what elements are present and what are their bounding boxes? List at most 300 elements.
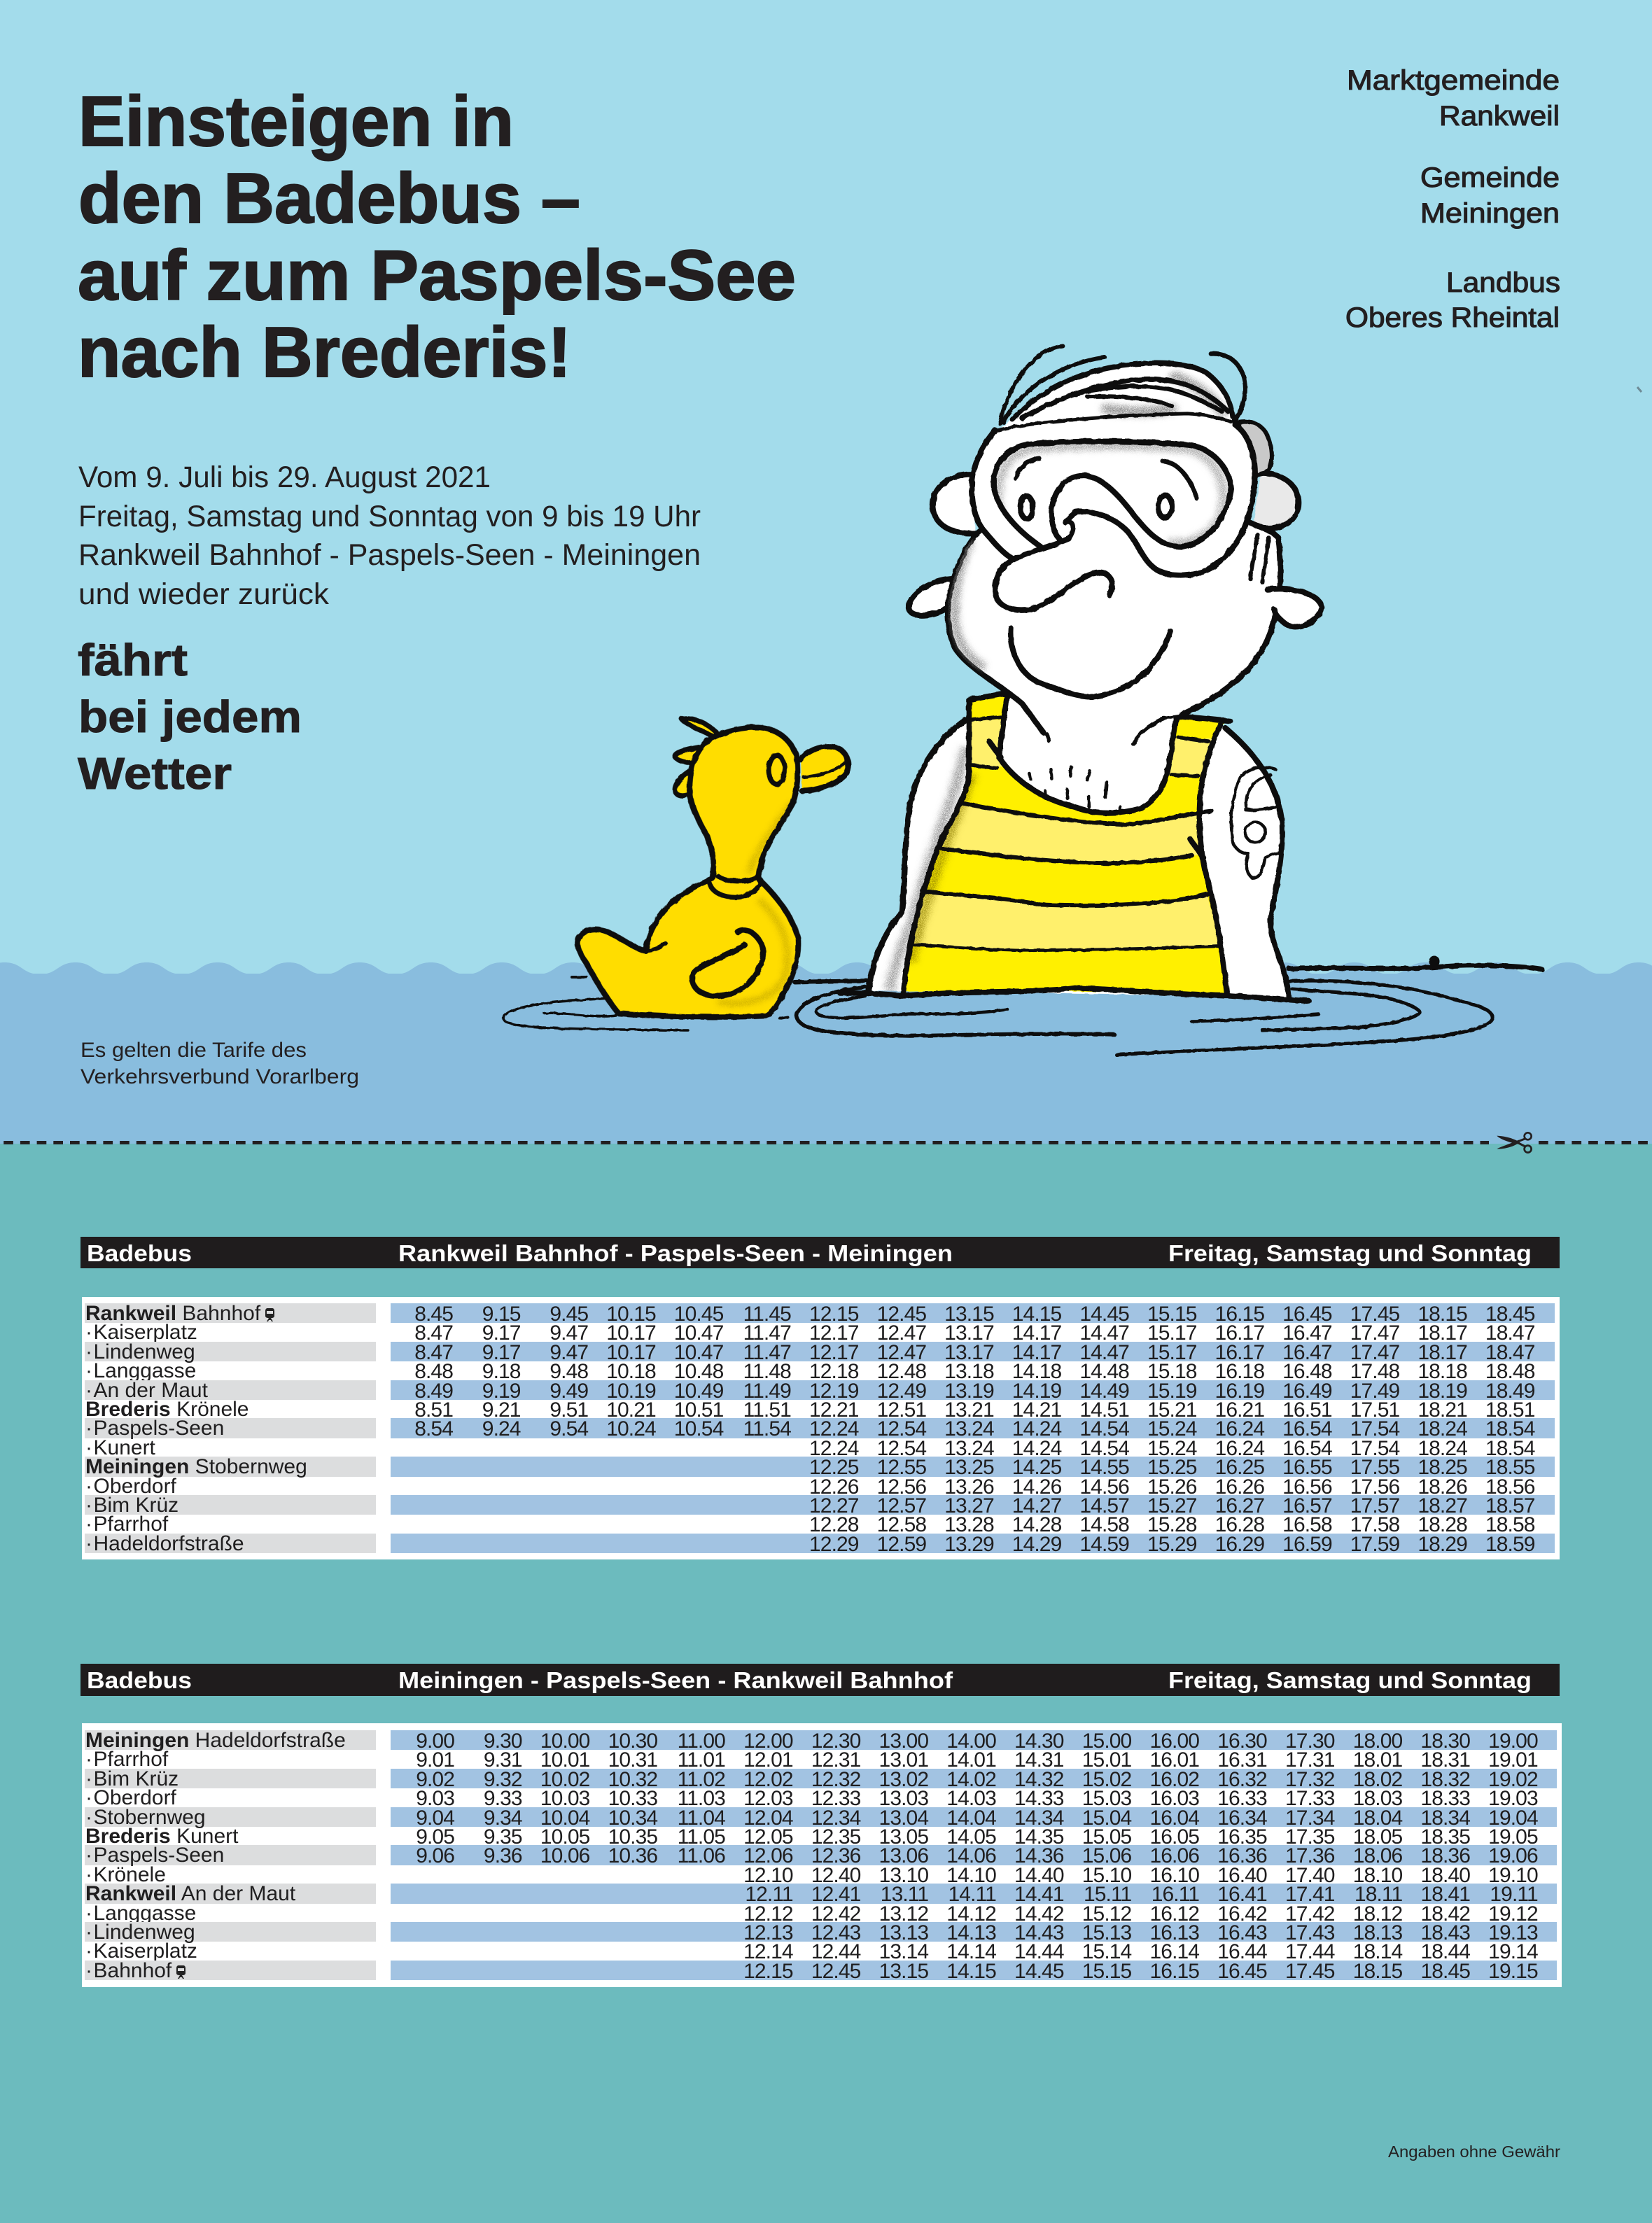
row: Rankweil Bahnhof: 9.45 [550,1303,588,1326]
row: Langgasse: 16.42 [1217,1902,1267,1926]
row: Lindenweg: 16.47 [1282,1341,1332,1364]
row: Oberdorf: 14.26 [1012,1475,1061,1499]
row: Stobernweg: 17.34 [1285,1807,1335,1830]
row: An der Maut: 14.19 [1012,1380,1061,1403]
row: Oberdorf: 18.03 [1353,1787,1402,1810]
row: Brederis Kunert: 12.35 [811,1825,860,1849]
row: Stobernweg: 10.34 [608,1807,657,1830]
row: Hadeldorfstraße: 14.59 [1079,1533,1129,1556]
row: Pfarrhof: 18.28 [1418,1513,1467,1536]
row: Rankweil Bahnhof: 12.45 [877,1303,926,1326]
duck beak [801,747,848,791]
row: Bim Krüz: 16.32 [1217,1768,1267,1791]
row: Paspels-Seen: 18.24 [1418,1417,1467,1440]
row: Kaiserplatz: 9.17 [482,1321,521,1345]
row: Pfarrhof: 14.28 [1012,1513,1061,1536]
chest hair [1029,766,1120,810]
row: Langgasse: 14.18 [1012,1360,1061,1383]
row: Kaiserplatz: 12.17 [809,1321,859,1345]
row: Kunert: 18.24 [1418,1437,1467,1460]
row: Pfarrhof: · [85,1513,92,1536]
row: Paspels-Seen: 9.06 [416,1844,454,1867]
row: Oberdorf: 12.56 [877,1475,926,1499]
row: Paspels-Seen: 8.54 [414,1417,453,1440]
row: Oberdorf: 12.03 [743,1787,793,1810]
row: Meiningen Hadeldorfstraße: 19.00 [1488,1730,1538,1753]
row: Stobernweg: 16.34 [1217,1807,1267,1830]
row: Langgasse: 12.42 [811,1902,860,1926]
row: Krönele: Krönele [94,1863,166,1886]
row: Pfarrhof [82,1514,1560,1534]
row: Meiningen Stobernweg: 18.25 [1418,1456,1467,1479]
row: An der Maut: 8.49 [414,1380,453,1403]
row: Langgasse: 12.48 [877,1360,926,1383]
row: Brederis Kunert: 9.05 [416,1825,454,1849]
row: Bim Krüz: 17.32 [1285,1768,1335,1791]
row: Bim Krüz: Bim Krüz [94,1767,178,1790]
row: Krönele: 18.10 [1353,1864,1402,1887]
row: Bim Krüz: 12.02 [743,1768,793,1791]
row: Stobernweg: 14.04 [946,1807,996,1830]
issuers: Rankweil [1439,101,1560,132]
fährt bei jedem Wetter: bei jedem [78,692,302,742]
headline: Einsteigen in [78,83,514,161]
right arm outline [1225,728,1289,997]
row: Paspels-Seen: 11.54 [743,1417,791,1440]
row: Langgasse: 9.18 [482,1360,521,1383]
duck wing [692,930,763,996]
row: Kaiserplatz: 18.44 [1420,1940,1470,1963]
row: An der Maut: · [85,1379,92,1402]
row: Brederis Kunert: 17.35 [1285,1825,1335,1849]
row: Rankweil Bahnhof: 17.45 [1350,1303,1399,1326]
row: Bim Krüz: 16.57 [1282,1494,1332,1517]
row: Kaiserplatz: 15.17 [1147,1321,1197,1345]
row: Bahnhof: 15.15 [1082,1960,1131,1983]
row: Kaiserplatz: 16.17 [1215,1321,1264,1345]
row: Kaiserplatz: · [85,1321,92,1344]
row: Krönele: 16.10 [1149,1864,1199,1887]
row: Meiningen Stobernweg: 13.25 [944,1456,994,1479]
row: An der Maut: 9.49 [550,1380,588,1403]
row: Paspels-Seen: 17.54 [1350,1417,1399,1440]
row: Kunert: 13.24 [944,1437,994,1460]
row: Stobernweg: 12.34 [811,1807,860,1830]
row: Paspels-Seen: 19.06 [1488,1844,1538,1867]
row: Oberdorf: 16.03 [1149,1787,1199,1810]
row: Krönele: 14.40 [1014,1864,1064,1887]
row: Rankweil Bahnhof: Rankweil Bahnhof [85,1302,260,1325]
row: Lindenweg: 14.17 [1012,1341,1061,1364]
row: Paspels-Seen: 12.06 [743,1844,793,1867]
row: Kunert: Kunert [94,1436,155,1459]
row: Lindenweg: 15.13 [1082,1921,1131,1944]
row: Lindenweg [82,1922,1562,1941]
left arm outline [869,720,965,992]
row: Meiningen Hadeldorfstraße [82,1730,1562,1749]
row: Langgasse: · [85,1902,92,1925]
row: Stobernweg: · [85,1806,92,1829]
tail crease [644,944,666,951]
row: Krönele: 19.10 [1488,1864,1538,1887]
duck shading [720,806,790,1004]
row: Paspels-Seen: 12.36 [811,1844,860,1867]
row: Brederis Krönele: 8.51 [414,1398,453,1422]
service dates and route: Rankweil Bahnhof - Paspels-Seen - Meiningen [78,538,701,572]
row: Bim Krüz [82,1769,1562,1788]
man: body [840,693,1309,1001]
row: Bim Krüz: 16.02 [1149,1768,1199,1791]
service dates and route: und wieder zurück [78,577,329,611]
row: Paspels-Seen: 14.54 [1079,1417,1129,1440]
row: Bim Krüz: 18.32 [1420,1768,1470,1791]
row: Bim Krüz: 10.32 [608,1768,657,1791]
row: Kaiserplatz: 19.14 [1488,1940,1538,1963]
row: Brederis Kunert: 15.05 [1082,1825,1131,1849]
row: Meiningen Hadeldorfstraße: 13.00 [879,1730,928,1753]
row: Brederis Krönele: 15.21 [1147,1398,1197,1422]
face [948,418,1280,733]
row: Hadeldorfstraße: 13.29 [944,1533,994,1556]
row: An der Maut: 15.19 [1147,1380,1197,1403]
row: Oberdorf: 14.56 [1079,1475,1129,1499]
row: Langgasse: 18.12 [1353,1902,1402,1926]
row: Meiningen Hadeldorfstraße: 12.00 [743,1730,793,1753]
row: Rankweil An der Maut: 17.41 [1285,1883,1335,1906]
eyebrows [1016,458,1197,498]
left upper ear [932,475,975,533]
row: Kaiserplatz: 12.14 [743,1940,793,1963]
row: Hadeldorfstraße: 18.29 [1418,1533,1467,1556]
row: Brederis Krönele: 10.21 [606,1398,656,1422]
row: Lindenweg: · [85,1340,92,1363]
service dates and route: Vom 9. Juli bis 29. August 2021 [78,461,491,494]
row: Meiningen Hadeldorfstraße: 16.30 [1217,1730,1267,1753]
row: Lindenweg: 11.47 [743,1341,791,1364]
row: Bim Krüz: · [85,1494,92,1517]
row: Kaiserplatz: 18.17 [1418,1321,1467,1345]
row: Paspels-Seen: 11.06 [678,1844,725,1867]
row: Meiningen Stobernweg: 14.55 [1079,1456,1129,1479]
row: Paspels-Seen: 12.54 [877,1417,926,1440]
row: Rankweil An der Maut: 18.11 [1354,1883,1402,1906]
left lower ear [909,579,951,615]
row: Lindenweg: Lindenweg [94,1921,195,1944]
row: Stobernweg: 16.04 [1149,1807,1199,1830]
row: Pfarrhof: 17.31 [1285,1748,1335,1772]
row: Rankweil Bahnhof: 18.15 [1418,1303,1467,1326]
row: An der Maut: 9.19 [482,1380,521,1403]
row: Bahnhof: 12.15 [743,1960,793,1983]
row: Bahnhof: 14.45 [1014,1960,1064,1983]
row: Bim Krüz [82,1495,1560,1514]
row: Brederis Krönele: 13.21 [944,1398,994,1422]
row: Kaiserplatz: 12.44 [811,1940,860,1963]
row: Rankweil Bahnhof: 9.15 [482,1303,521,1326]
row: Kaiserplatz: 16.47 [1282,1321,1332,1345]
row: Meiningen Hadeldorfstraße: 18.30 [1420,1730,1470,1753]
row: Kaiserplatz: 14.47 [1079,1321,1129,1345]
row: Brederis Kunert: 19.05 [1488,1825,1538,1849]
row: Langgasse: 18.48 [1485,1360,1534,1383]
row: Rankweil Bahnhof: 12.15 [809,1303,859,1326]
arm shading [890,750,965,988]
row: Meiningen Stobernweg: 18.55 [1485,1456,1535,1479]
row: Bim Krüz: 18.02 [1353,1768,1402,1791]
row: Kaiserplatz: 15.14 [1082,1940,1131,1963]
duck eye [769,755,785,784]
row: Meiningen Hadeldorfstraße: 11.00 [678,1730,725,1753]
row: Bim Krüz: 18.57 [1485,1494,1535,1517]
row: Kunert: 15.24 [1147,1437,1197,1460]
row: Lindenweg: 17.47 [1350,1341,1399,1364]
row: Paspels-Seen: 14.36 [1014,1844,1064,1867]
row: Bim Krüz: 11.02 [678,1768,725,1791]
timetable 2 header bar: Meiningen - Paspels-Seen - Rankweil Bahnhof [398,1667,953,1693]
row: Hadeldorfstraße: 12.59 [877,1533,926,1556]
row: Bim Krüz: 14.02 [946,1768,996,1791]
row: Meiningen Hadeldorfstraße: 16.00 [1149,1730,1199,1753]
row: Pfarrhof: 15.28 [1147,1513,1197,1536]
row: Rankweil An der Maut: 16.11 [1152,1883,1199,1906]
row: Kaiserplatz: Kaiserplatz [94,1321,197,1344]
row: Paspels-Seen: 18.36 [1420,1844,1470,1867]
timetable 1: Rankweil to Meiningen [82,1297,1560,1559]
row: Lindenweg: 13.17 [944,1341,994,1364]
issuers: Oberes Rheintal [1345,302,1560,333]
row: Oberdorf: 19.03 [1488,1787,1538,1810]
row: Paspels-Seen [82,1845,1562,1865]
row: Brederis Kunert [82,1826,1562,1845]
row: Paspels-Seen: 10.36 [608,1844,657,1867]
row: Paspels-Seen: 17.36 [1285,1844,1335,1867]
tariff note [80,1039,359,1088]
right upper ear [1253,473,1298,528]
row: Meiningen Stobernweg: 16.55 [1282,1456,1332,1479]
row: Paspels-Seen: 18.54 [1485,1417,1534,1440]
row: Bim Krüz: 12.57 [877,1494,926,1517]
row: Bim Krüz: 10.02 [540,1768,589,1791]
row: Lindenweg: 12.47 [877,1341,926,1364]
row: Kaiserplatz: 18.14 [1353,1940,1402,1963]
row: Kaiserplatz: 9.47 [550,1321,588,1345]
row: Kunert: 16.24 [1215,1437,1264,1460]
issuers [1345,65,1560,333]
row: Lindenweg: 15.17 [1147,1341,1197,1364]
row: Krönele: 15.10 [1082,1864,1131,1887]
fährt bei jedem Wetter: Wetter [78,748,232,799]
row: Brederis Kunert: 18.35 [1420,1825,1470,1849]
row: Bahnhof: 16.15 [1149,1960,1199,1983]
row: Lindenweg [82,1342,1560,1361]
row: An der Maut: 16.49 [1282,1380,1332,1403]
hair [998,346,1245,433]
row: Paspels-Seen: Paspels-Seen [94,1417,224,1440]
row: Stobernweg: 18.04 [1353,1807,1402,1830]
row: Lindenweg: 14.47 [1079,1341,1129,1364]
row: Kaiserplatz: 14.14 [946,1940,996,1963]
row: Lindenweg: 10.17 [606,1341,656,1364]
issuers: Landbus [1446,267,1560,298]
row: Rankweil Bahnhof: 16.15 [1215,1303,1264,1326]
issuers: Meiningen [1420,198,1560,229]
row: Paspels-Seen: · [85,1417,92,1440]
row: Meiningen Hadeldorfstraße: 17.30 [1285,1730,1335,1753]
waterline at the waist [840,988,1309,1001]
row: Pfarrhof: 11.01 [678,1748,725,1772]
row: An der Maut [82,1380,1560,1399]
row: An der Maut: 11.49 [743,1380,791,1403]
row: Paspels-Seen: 16.36 [1217,1844,1267,1867]
row: Stobernweg: 11.04 [678,1807,725,1830]
row: Rankweil Bahnhof: 16.45 [1282,1303,1332,1326]
row: Krönele: 18.40 [1420,1864,1470,1887]
row: Hadeldorfstraße: 14.29 [1012,1533,1061,1556]
row: Oberdorf: 18.26 [1418,1475,1467,1499]
row: Brederis Krönele: 18.51 [1485,1398,1534,1422]
row: Kunert: 14.54 [1079,1437,1129,1460]
row: Brederis Krönele: Brederis Krönele [85,1398,248,1421]
row: Pfarrhof: 15.01 [1082,1748,1131,1772]
row: Kaiserplatz: 16.14 [1149,1940,1199,1963]
timetable 2 header bar [80,1664,1560,1696]
row: Oberdorf: 10.33 [608,1787,657,1810]
row: Rankweil An der Maut: 15.11 [1084,1883,1131,1906]
row: Lindenweg: 12.43 [811,1921,860,1944]
row: Paspels-Seen: 16.54 [1282,1417,1332,1440]
row: Paspels-Seen: 10.06 [540,1844,589,1867]
row: Kunert: 12.54 [877,1437,926,1460]
row: Paspels-Seen [82,1418,1560,1438]
row: Langgasse: 16.18 [1215,1360,1264,1383]
torso and arms fill [867,694,1289,997]
row: Meiningen Hadeldorfstraße: 14.30 [1014,1730,1064,1753]
right lower ear [1267,589,1322,626]
sky background [0,0,1652,1144]
row: Brederis Kunert: 16.05 [1149,1825,1199,1849]
row: Rankweil Bahnhof: 13.15 [944,1303,994,1326]
row: Oberdorf: 14.33 [1014,1787,1064,1810]
goggle frame [983,512,1247,575]
row: Pfarrhof: 16.31 [1217,1748,1267,1772]
row: Bahnhof: 18.15 [1353,1960,1402,1983]
row: Stobernweg: 19.04 [1488,1807,1538,1830]
row: Bahnhof: 19.15 [1488,1960,1538,1983]
row: Paspels-Seen: 18.06 [1353,1844,1402,1867]
row: Rankweil Bahnhof: 11.45 [743,1303,791,1326]
row: Stobernweg: 14.34 [1014,1807,1064,1830]
row: Oberdorf: 15.26 [1147,1475,1197,1499]
row: An der Maut: 12.19 [809,1380,859,1403]
row: Brederis Krönele: 9.21 [482,1398,521,1422]
row: Langgasse: 16.48 [1282,1360,1332,1383]
row: Meiningen Stobernweg: 14.25 [1012,1456,1061,1479]
row: Pfarrhof: 18.31 [1420,1748,1470,1772]
row: Pfarrhof: 19.01 [1488,1748,1538,1772]
service dates and route: Freitag, Samstag und Sonntag von 9 bis 19 Uhr [78,500,701,533]
row: Lindenweg: · [85,1921,92,1944]
row: Bahnhof: 12.45 [811,1960,860,1983]
fährt bei jedem Wetter: fährt [78,635,188,685]
row: Rankweil An der Maut: 19.11 [1490,1883,1538,1906]
row: Langgasse: 8.48 [414,1360,453,1383]
row: Paspels-Seen: 15.24 [1147,1417,1197,1440]
row: Langgasse: 14.42 [1014,1902,1064,1926]
row: Brederis Kunert: 18.05 [1353,1825,1402,1849]
row: Bim Krüz: 9.32 [484,1768,522,1791]
row: Paspels-Seen: 14.24 [1012,1417,1061,1440]
row: An der Maut: 17.49 [1350,1380,1399,1403]
row: Bim Krüz: 17.57 [1350,1494,1399,1517]
row: Lindenweg: 12.13 [743,1921,793,1944]
duck collar [710,876,761,897]
row: Brederis Kunert: 14.05 [946,1825,996,1849]
row: Meiningen Hadeldorfstraße: 14.00 [946,1730,996,1753]
row: Krönele: 17.40 [1285,1864,1335,1887]
row: Rankweil Bahnhof: 14.15 [1012,1303,1061,1326]
shoulder tattoo [1231,768,1279,878]
row: Hadeldorfstraße: · [85,1532,92,1555]
row: Pfarrhof [82,1749,1562,1769]
lake water with waves [0,959,1652,1144]
row: Kaiserplatz: 12.47 [877,1321,926,1345]
row: Langgasse: 13.12 [879,1902,928,1926]
row: Pfarrhof: 14.01 [946,1748,996,1772]
row: Kaiserplatz: 13.14 [879,1940,928,1963]
row: Meiningen Stobernweg: Meiningen Stobernweg [85,1455,307,1478]
row: Pfarrhof: Pfarrhof [94,1748,168,1771]
row: Lindenweg: 18.17 [1418,1341,1467,1364]
eyes [1021,496,1172,519]
row: Rankweil An der Maut [82,1884,1562,1903]
row: Lindenweg: 14.13 [946,1921,996,1944]
row: Kaiserplatz: Kaiserplatz [94,1940,197,1963]
row: Lindenweg: 9.47 [550,1341,588,1364]
row: Pfarrhof: 16.28 [1215,1513,1264,1536]
row: An der Maut: 14.49 [1079,1380,1129,1403]
row: Bim Krüz: 18.27 [1418,1494,1467,1517]
row: Kunert: 14.24 [1012,1437,1061,1460]
row: Pfarrhof: 17.58 [1350,1513,1399,1536]
row: Krönele: 16.40 [1217,1864,1267,1887]
row: Pfarrhof: 12.28 [809,1513,859,1536]
face shading [954,542,981,666]
row: Meiningen Hadeldorfstraße: 12.30 [811,1730,860,1753]
row: Kaiserplatz: 16.44 [1217,1940,1267,1963]
row: Oberdorf: Oberdorf [94,1786,176,1809]
row: Lindenweg: 9.17 [482,1341,521,1364]
row: Oberdorf: 10.03 [540,1787,589,1810]
row: Kaiserplatz: 11.47 [743,1321,791,1345]
row: Bim Krüz: 14.27 [1012,1494,1061,1517]
timetable 2 header bar: Freitag, Samstag und Sonntag [1168,1667,1532,1693]
row: Pfarrhof: 16.58 [1282,1513,1332,1536]
row: Paspels-Seen: Paspels-Seen [94,1844,224,1867]
row: Bim Krüz: 14.57 [1079,1494,1129,1517]
row: Lindenweg: 16.13 [1149,1921,1199,1944]
row: Langgasse: 17.42 [1285,1902,1335,1926]
timetable 1 header bar: Badebus [87,1240,192,1266]
row: Bahnhof: 13.15 [879,1960,928,1983]
headline: den Badebus – [78,160,580,238]
row: Kaiserplatz: 8.47 [414,1321,453,1345]
row: Bim Krüz: 19.02 [1488,1768,1538,1791]
row: Brederis Krönele: 12.21 [809,1398,859,1422]
row: Brederis Kunert: Brederis Kunert [85,1825,238,1848]
row: Oberdorf: 18.56 [1485,1475,1535,1499]
row: Pfarrhof: 18.01 [1353,1748,1402,1772]
row: Langgasse: Langgasse [94,1902,196,1925]
